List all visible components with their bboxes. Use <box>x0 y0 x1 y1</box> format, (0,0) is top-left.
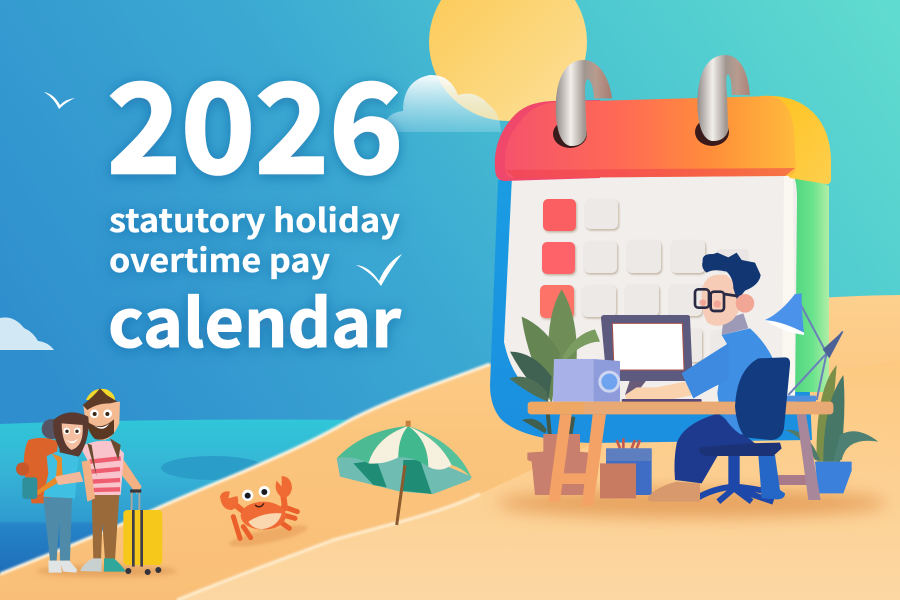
wheels <box>125 568 131 574</box>
crab right eye <box>259 486 270 497</box>
right ring <box>697 55 750 141</box>
calendar date squares <box>540 199 729 364</box>
calendar page <box>504 175 797 405</box>
upper dune highlight <box>0 364 490 574</box>
monitor screen <box>612 323 684 370</box>
pencils <box>617 438 640 448</box>
umbrella underside <box>337 450 472 494</box>
calendar illustration <box>490 55 831 443</box>
lower dune highlight <box>177 494 480 600</box>
ground shadow <box>37 565 177 577</box>
desk worker scene <box>509 253 878 506</box>
blue box with pencils <box>606 438 652 495</box>
blue box top <box>606 448 652 461</box>
woman <box>37 412 89 573</box>
keyboard <box>622 399 702 402</box>
cardboard box <box>600 463 636 498</box>
subtitle line one: statutory holiday <box>109 196 400 242</box>
crab belly <box>248 513 282 529</box>
man shoes <box>80 558 102 572</box>
blue box <box>606 448 652 495</box>
man face <box>83 402 120 440</box>
neck <box>722 313 748 335</box>
chair seat <box>699 443 782 456</box>
woman smile <box>66 438 78 443</box>
lamp shade <box>765 293 804 335</box>
sea <box>0 420 520 600</box>
faint date square <box>717 249 749 273</box>
face <box>702 274 742 326</box>
plant leaves <box>548 289 577 360</box>
projector box <box>553 359 620 402</box>
cheeks <box>699 299 706 306</box>
bird top left <box>44 92 75 109</box>
calendar word: calendar <box>108 271 401 367</box>
suitcase body <box>123 510 162 565</box>
clasped hands <box>82 460 95 502</box>
shirt stripes <box>89 458 121 490</box>
sleeping mat <box>42 419 62 439</box>
desk right leg <box>797 414 821 500</box>
man hair <box>83 388 117 410</box>
plant stems <box>547 402 573 437</box>
projector side <box>593 359 620 402</box>
cloud behind title <box>382 75 501 132</box>
bedroll <box>16 462 29 476</box>
canopy green center <box>398 426 428 467</box>
woman eyes <box>63 428 70 434</box>
desk back leg crossbar <box>777 475 810 485</box>
chair backrest <box>735 357 790 440</box>
desk left leg <box>548 414 606 506</box>
monitor frame <box>601 315 693 381</box>
subtitle line two: overtime pay <box>109 236 330 282</box>
monitor <box>601 315 693 395</box>
lamp arm <box>788 303 843 400</box>
ring hole left <box>553 120 587 148</box>
worker head <box>695 253 761 335</box>
handle <box>132 492 139 512</box>
sand dune upper <box>0 295 900 600</box>
underside dark panels <box>353 460 432 494</box>
suitcase straps <box>133 510 142 567</box>
crab legs <box>233 507 297 538</box>
crab arms <box>232 490 285 510</box>
binder rings <box>556 55 750 146</box>
umbrella pole <box>397 465 405 525</box>
man beard <box>87 419 114 440</box>
traveller couple <box>16 388 177 577</box>
crab right claw <box>276 476 292 497</box>
worker forearm <box>625 382 693 402</box>
crab smile <box>255 503 264 507</box>
lamp elbow <box>823 331 843 358</box>
pot <box>527 434 588 495</box>
woman shirt <box>43 452 78 498</box>
lamp light <box>765 320 804 335</box>
canopy cream left <box>368 426 408 464</box>
desk top <box>528 402 833 414</box>
projector lens <box>598 371 620 393</box>
calendar side green <box>793 178 829 392</box>
title <box>107 29 403 367</box>
woman hair <box>53 412 89 462</box>
canopy green right <box>408 426 472 478</box>
right potted plant <box>785 365 878 493</box>
man backpack strap <box>87 438 121 477</box>
year heading: 2026 <box>107 29 403 209</box>
woman shoes <box>48 561 77 573</box>
chair base <box>697 453 782 502</box>
worker sleeve <box>682 343 728 398</box>
monitor stand <box>625 380 647 395</box>
man shirt <box>80 441 124 495</box>
projector body <box>553 359 593 402</box>
lamp base <box>786 396 816 402</box>
left cloud <box>0 317 54 350</box>
suitcase <box>123 489 162 575</box>
rear red binding <box>495 100 600 181</box>
man cap <box>86 389 115 400</box>
sea ripple <box>161 456 265 480</box>
crab shadow <box>228 521 309 551</box>
desk scene ground shadow <box>497 488 887 518</box>
backpack strap <box>37 453 63 495</box>
header lower edge <box>505 168 795 178</box>
right pot <box>815 462 852 493</box>
crab body <box>241 502 286 530</box>
page right highlight <box>782 175 795 405</box>
crab <box>220 476 309 551</box>
calendar back plate blue <box>490 180 812 443</box>
canopy green left <box>337 426 408 463</box>
beach umbrella <box>337 421 472 525</box>
man eyes <box>90 409 99 418</box>
woman arms <box>55 472 83 485</box>
worker torso shirt <box>717 328 775 440</box>
man legs <box>92 494 119 560</box>
bird near title <box>356 254 402 286</box>
backpack body <box>24 438 58 503</box>
worker legs <box>674 413 755 483</box>
crab left claw <box>220 491 238 510</box>
man <box>80 388 142 572</box>
woman jeans <box>43 497 72 561</box>
chair front post <box>758 455 785 499</box>
ring hole right <box>695 118 729 146</box>
desk right section <box>584 402 833 414</box>
sand dune lower <box>177 360 900 600</box>
backpack pocket <box>22 477 37 499</box>
chair <box>699 357 790 456</box>
left potted plant <box>509 289 600 495</box>
lamp <box>765 293 843 402</box>
glasses <box>695 289 737 311</box>
woman face <box>62 423 83 450</box>
ear <box>736 294 754 313</box>
crab left eye <box>242 490 253 501</box>
right plant leaves <box>817 365 837 462</box>
rear yellow binding <box>760 96 831 184</box>
left ring <box>556 60 612 146</box>
umbrella pole top <box>406 421 411 427</box>
calendar header red orange <box>505 96 796 178</box>
canopy cream right <box>408 426 452 470</box>
hair <box>702 253 761 301</box>
man smile <box>93 423 109 429</box>
shoes <box>648 482 700 502</box>
sun <box>429 0 587 121</box>
man arm <box>115 453 142 494</box>
backpack <box>16 419 62 503</box>
